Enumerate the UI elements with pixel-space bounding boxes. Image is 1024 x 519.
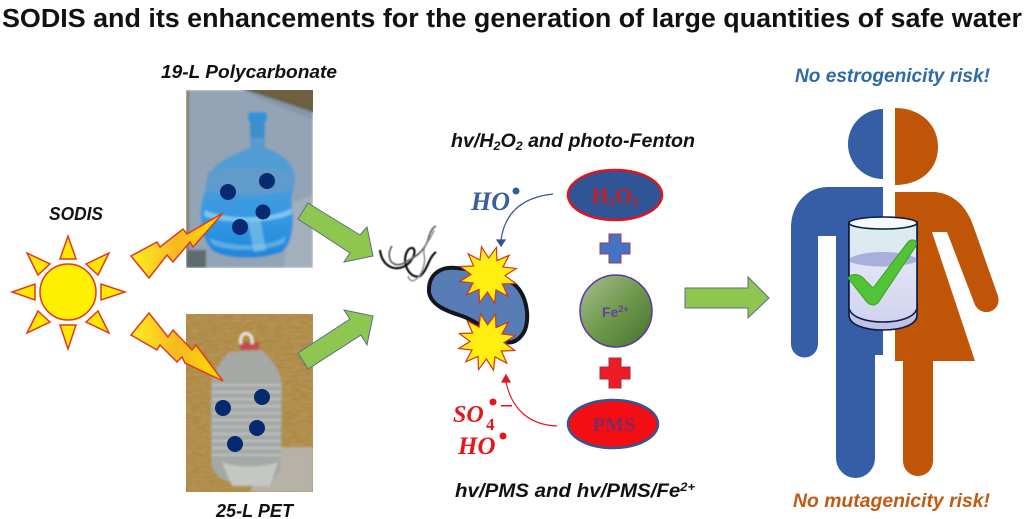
title: SODIS and its enhancements for the generation of large quantities of safe water [2, 5, 1022, 33]
icon: flagella [380, 226, 436, 281]
icon: glass of water [848, 217, 917, 330]
photo: 25-L PET bottle [186, 314, 313, 492]
label: sulfate radical: SO [453, 402, 484, 428]
icon: red plus [600, 358, 630, 388]
icon: lightning bolt lower [131, 313, 223, 381]
icon: blue plus [600, 234, 630, 263]
reagent: H2O2: 2 [608, 194, 615, 209]
label: sulfate radical: 4 [486, 415, 495, 434]
icon: sun [12, 236, 125, 349]
arrow: treatment to safe water [685, 277, 769, 318]
label: 19-L Polycarbonate: 19-L Polycarbonate [161, 62, 337, 82]
icon: burst lower [459, 314, 515, 370]
label: No estrogenicity risk: No estrogenicity risk! [795, 66, 990, 87]
label: hydroxyl radical red: HO [457, 433, 496, 460]
reagent: Fe2+: Fe [602, 304, 618, 320]
markers [220, 173, 275, 235]
arrow: upper bottle to bacterium [298, 203, 373, 262]
label: sulfate radical [453, 398, 512, 434]
icon: green check mark [848, 240, 916, 305]
label: hv/H2O2 and photo-Fenton: and photo-Fenton [523, 131, 695, 152]
markers [215, 389, 270, 452]
arrow: H2O2 to bacterium [497, 194, 553, 246]
icon: burst upper [460, 247, 516, 303]
reagent: PMS [568, 400, 658, 448]
label: hv/PMS and hv/PMS/Fe2+: 2+ [679, 480, 695, 494]
label: No mutagenicity risk: No mutagenicity risk! [793, 491, 990, 512]
reagent: H2O2: H [591, 183, 608, 208]
label: SODIS: SODIS [49, 204, 103, 224]
label: hv/H2O2 and photo-Fenton: 2 [493, 139, 501, 153]
icon: lightning bolt upper [131, 213, 223, 278]
arrow: lower bottle to bacterium [298, 310, 373, 369]
label: hydroxyl radical blue: HO [470, 187, 510, 216]
label: hv/H2O2 and photo-Fenton: hv/H [451, 131, 492, 152]
label: hv/H2O2 and photo-Fenton: O [500, 131, 516, 152]
reagent: H2O2: O [615, 183, 632, 208]
reagent: Fe2+: 2+ [618, 304, 629, 314]
label: hv/PMS and hv/PMS/Fe2+: hv/PMS and hv/PMS/Fe [455, 481, 664, 502]
icon: male half figure [791, 109, 883, 478]
arrow: PMS to bacterium [502, 375, 557, 426]
reagent: Fe2+ [580, 275, 652, 347]
label: hv/H2O2 and photo-Fenton: 2 [515, 139, 523, 153]
reagent: H2O2: 2 [632, 194, 639, 209]
icon: female half figure [895, 108, 999, 476]
reagent: H2O2 [568, 170, 662, 220]
icon: bacterium [429, 268, 527, 342]
photo: 19-L polycarbonate bottle [186, 88, 315, 268]
reagent: PMS: PMS [593, 414, 635, 436]
